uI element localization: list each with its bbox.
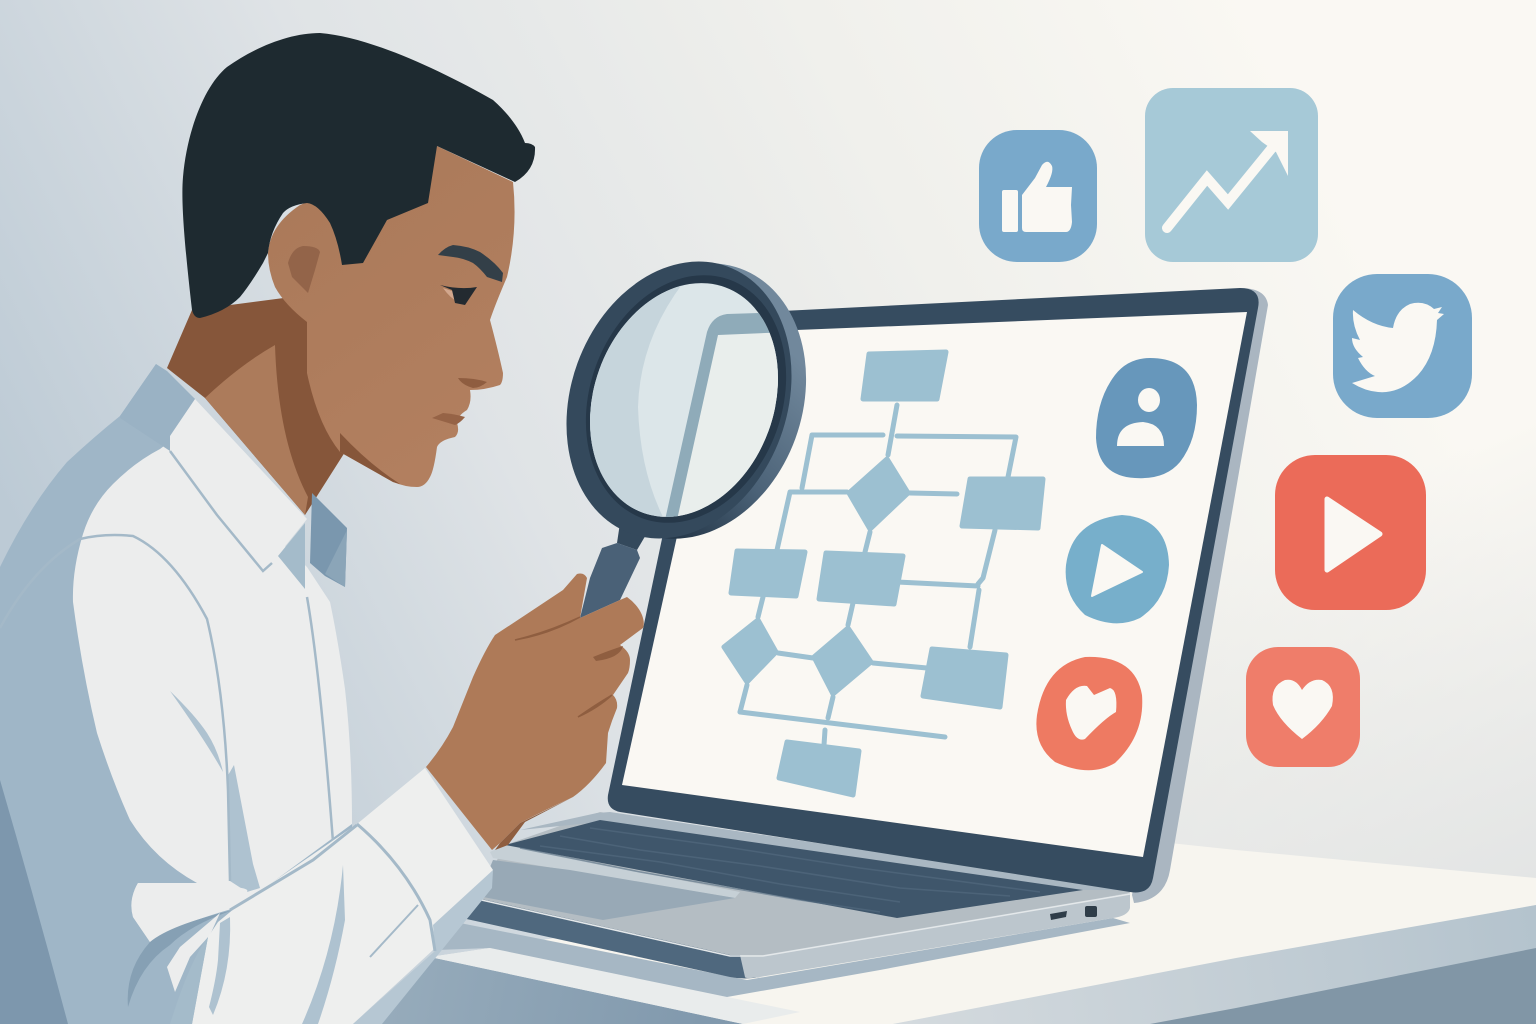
lens inner ring xyxy=(552,247,820,551)
ports xyxy=(1050,906,1097,920)
forearm folds xyxy=(170,824,435,1024)
desk side right xyxy=(893,905,1536,1024)
sleeve fold gap xyxy=(227,765,260,892)
nose shadow xyxy=(458,378,487,388)
on-screen icon: play xyxy=(1066,515,1169,623)
handle xyxy=(580,523,647,618)
shirt shadow area xyxy=(0,780,68,1024)
floating icon: growth arrow xyxy=(1145,88,1318,262)
lens glass xyxy=(590,283,778,517)
forearm xyxy=(192,768,493,1024)
laptop base xyxy=(462,812,1130,978)
floating icon: thumbs up xyxy=(979,130,1097,262)
sleeve knot xyxy=(132,883,247,942)
chin shadow xyxy=(340,433,400,484)
collar inner xyxy=(310,493,347,587)
collar edge xyxy=(170,451,272,571)
floating icon: bird xyxy=(1333,274,1472,418)
inner ear xyxy=(288,246,320,293)
floating icon: red play button xyxy=(1275,455,1426,610)
shirt back xyxy=(0,364,353,1024)
neck xyxy=(167,290,345,515)
laptop screen xyxy=(622,312,1247,857)
lens side rim xyxy=(540,231,844,571)
laptop xyxy=(437,288,1268,997)
desk front left xyxy=(380,957,743,1024)
eye xyxy=(440,285,477,305)
collar back xyxy=(120,364,195,451)
face and ear xyxy=(268,146,515,487)
desk side shade xyxy=(1150,948,1536,1024)
sleeve shadow folds xyxy=(128,910,233,1007)
hand xyxy=(426,574,644,850)
eyebrow xyxy=(438,245,503,282)
desk front strip xyxy=(430,948,800,1024)
desk xyxy=(380,843,1536,1024)
base top light strip xyxy=(490,845,740,898)
base front edge highlight xyxy=(477,894,1130,956)
sleeve fold xyxy=(170,691,223,772)
hair xyxy=(182,33,535,318)
flowchart connectors xyxy=(740,405,1016,745)
forearm underside shadow xyxy=(353,870,493,1024)
laptop lid back edge xyxy=(1132,288,1268,903)
on-screen icon: profile xyxy=(1096,358,1197,478)
laptop desk shadow xyxy=(437,918,1130,997)
base side right xyxy=(740,893,1130,978)
base side left xyxy=(462,898,760,978)
laptop screen frame xyxy=(608,288,1259,892)
trackpad xyxy=(478,860,735,920)
hinge strip xyxy=(520,812,1130,890)
collar shadow xyxy=(278,523,305,589)
floating icon: heart xyxy=(1246,647,1360,767)
flowchart on screen xyxy=(724,352,1043,795)
magnifying glass xyxy=(426,262,806,850)
lens front rim xyxy=(529,230,829,570)
flowchart nodes xyxy=(724,352,1043,795)
keyboard xyxy=(505,820,1083,918)
person xyxy=(0,33,535,1024)
collar front xyxy=(170,399,307,571)
on-screen icon: heart xyxy=(1036,657,1142,770)
shirt seam lines xyxy=(0,535,333,881)
shirt torso and sleeve xyxy=(73,440,352,942)
lips xyxy=(432,413,465,425)
base top xyxy=(477,812,1130,955)
